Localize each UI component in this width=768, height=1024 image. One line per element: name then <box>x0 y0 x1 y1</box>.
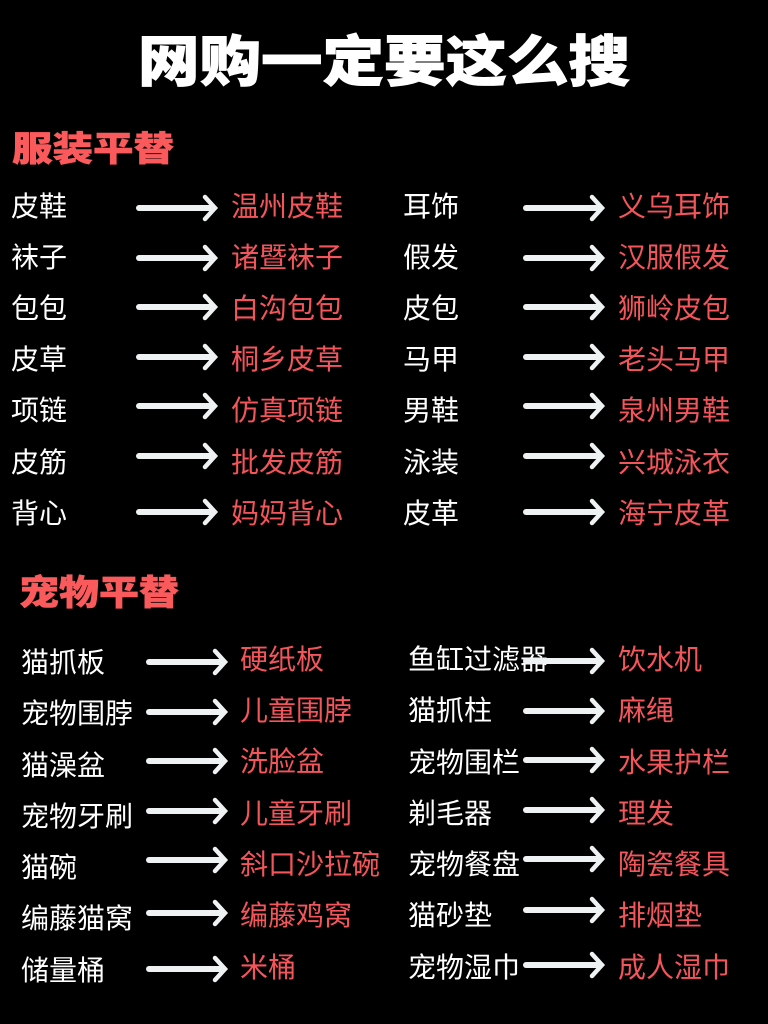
row: socks: 诸暨袜子 <box>231 242 343 273</box>
row: swimwear: 泳装 <box>403 447 459 478</box>
row: pet plate: 陶瓷餐具 <box>618 849 730 880</box>
row: wig: 假发 <box>403 242 459 273</box>
row: storage bucket: 储量桶 <box>21 955 105 986</box>
row: cat scratcher: 猫抓板 <box>21 647 105 678</box>
panel: pet alternatives <box>19 573 730 986</box>
row: waistcoat: 老头马甲 <box>618 344 730 375</box>
row: pet plate: 宠物餐盘 <box>408 849 520 880</box>
row: fur: 桐乡皮草 <box>231 344 343 375</box>
row: cat post: 麻绳 <box>618 695 674 726</box>
row: cat bath: 猫澡盆 <box>21 750 105 781</box>
row: pet plate <box>408 848 730 880</box>
row: hair ties: 批发皮筋 <box>231 447 343 478</box>
row: pet scarf: 儿童围脖 <box>240 695 352 726</box>
row: litter mat: 猫砂垫 <box>408 900 492 931</box>
row: cat bowl: 猫碗 <box>21 852 77 883</box>
row: pet toothbrush <box>21 798 352 832</box>
row: pet fence: 宠物围栏 <box>408 747 520 778</box>
row: leather bag <box>403 293 730 324</box>
row: cat bath: 洗脸盆 <box>240 746 324 777</box>
heading: clothing alternatives: 服装平替 <box>12 131 174 169</box>
left column: clothing <box>11 191 343 529</box>
row: cat scratcher: 硬纸板 <box>240 644 324 675</box>
row: rattan cat bed: 编藤鸡窝 <box>240 900 352 931</box>
row: rattan cat bed <box>21 900 352 934</box>
row: men's shoes <box>403 395 730 426</box>
row: necklace: 仿真项链 <box>231 395 343 426</box>
row: pet wipes: 成人湿巾 <box>618 952 730 983</box>
row: leather bag: 皮包 <box>403 293 459 324</box>
heading: pet alternatives: 宠物平替 <box>19 573 179 612</box>
row: pet toothbrush: 宠物牙刷 <box>21 801 133 832</box>
row: storage bucket <box>21 952 296 986</box>
row: men's shoes: 男鞋 <box>403 395 459 426</box>
left column: pets <box>21 644 380 986</box>
row: leather: 皮革 <box>403 498 459 529</box>
row: fur: 皮草 <box>11 344 67 375</box>
row: bags: 白沟包包 <box>231 293 343 324</box>
row: pet wipes: 宠物湿巾 <box>408 952 520 983</box>
row: storage bucket: 米桶 <box>240 952 296 983</box>
row: pet scarf <box>21 695 352 729</box>
row: necklace <box>11 395 343 426</box>
row: swimwear <box>403 445 730 478</box>
row: leather: 海宁皮革 <box>618 498 730 529</box>
title: 网购一定要这么搜 <box>138 32 630 93</box>
row: cat bath <box>21 746 324 781</box>
row: aquarium filter: 饮水机 <box>618 644 702 675</box>
right column: pets <box>408 644 730 983</box>
row: pet toothbrush: 儿童牙刷 <box>240 798 352 829</box>
row: earrings: 耳饰 <box>403 191 459 222</box>
row: aquarium filter: 鱼缸过滤器 <box>408 644 548 675</box>
row: cat scratcher <box>21 644 324 678</box>
row: leather shoes <box>11 191 343 222</box>
row: cat bowl: 斜口沙拉碗 <box>240 849 380 880</box>
row: shaver: 剃毛器 <box>408 798 492 829</box>
row: vest: 妈妈背心 <box>231 498 343 529</box>
row: leather shoes: 皮鞋 <box>11 191 67 222</box>
row: earrings: 义乌耳饰 <box>618 191 730 222</box>
row: bags <box>11 293 343 324</box>
row: bags: 包包 <box>11 293 67 324</box>
row: hair ties <box>11 445 343 478</box>
row: waistcoat <box>403 344 730 375</box>
right column: clothing <box>403 191 730 529</box>
row: pet fence: 水果护栏 <box>618 747 730 778</box>
row: hair ties: 皮筋 <box>11 447 67 478</box>
row: wig <box>403 242 730 273</box>
row: vest <box>11 498 343 529</box>
row: shaver <box>408 798 674 829</box>
row: leather shoes: 温州皮鞋 <box>231 191 343 222</box>
row: men's shoes: 泉州男鞋 <box>618 395 730 426</box>
row: wig: 汉服假发 <box>618 242 730 273</box>
row: cat post <box>408 695 674 726</box>
row: earrings <box>403 191 730 222</box>
row: vest: 背心 <box>11 498 67 529</box>
row: fur <box>11 344 343 375</box>
row: socks <box>11 242 343 273</box>
row: shaver: 理发 <box>618 798 674 829</box>
row: leather <box>403 498 730 529</box>
row: pet wipes <box>408 952 730 983</box>
row: waistcoat: 马甲 <box>403 344 459 375</box>
row: cat bowl <box>21 849 380 883</box>
panel: clothing alternatives <box>11 131 730 529</box>
row: rattan cat bed: 编藤猫窝 <box>21 903 133 934</box>
row: swimwear: 兴城泳衣 <box>618 447 730 478</box>
row: aquarium filter <box>408 644 702 675</box>
row: leather bag: 狮岭皮包 <box>618 293 730 324</box>
row: socks: 袜子 <box>11 242 67 273</box>
row: necklace: 项链 <box>11 395 67 426</box>
row: pet scarf: 宠物围脖 <box>21 698 133 729</box>
row: cat post: 猫抓柱 <box>408 695 492 726</box>
row: litter mat: 排烟垫 <box>618 900 702 931</box>
row: pet fence <box>408 747 730 778</box>
row: litter mat <box>408 899 702 931</box>
